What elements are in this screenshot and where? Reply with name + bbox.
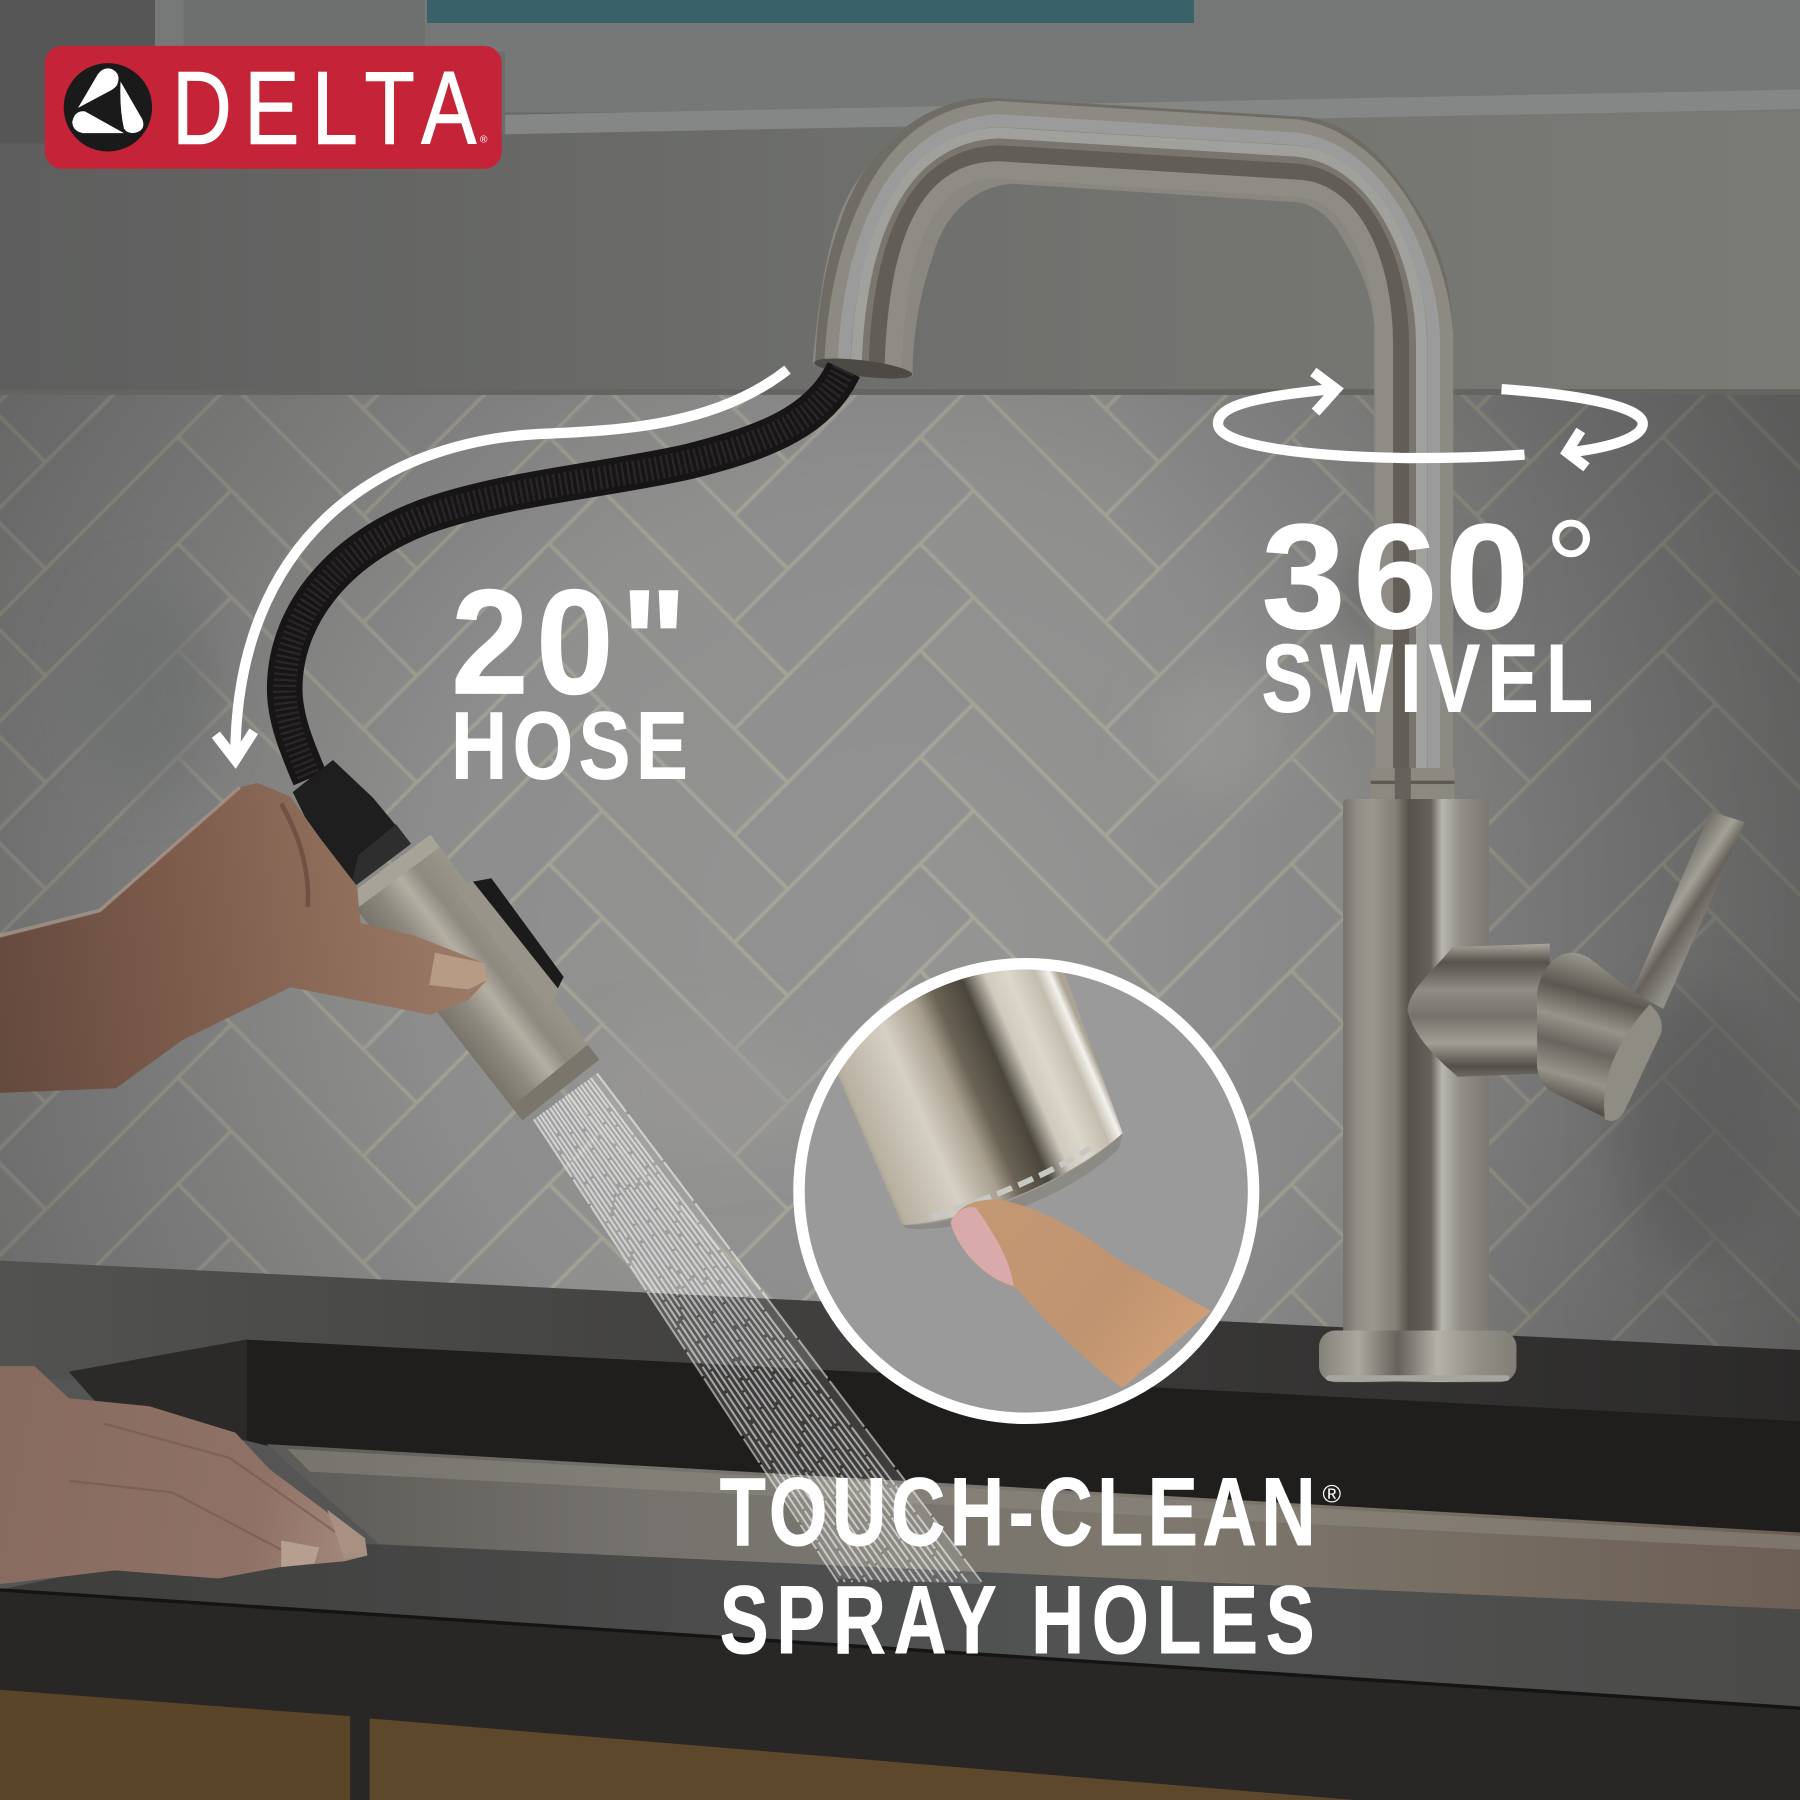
second hand resting on the counter — [0, 1366, 367, 1584]
text: 20 inch hose: 20" — [451, 558, 695, 725]
callout: touch-clean inset circle — [799, 918, 1254, 1418]
icon: spray nozzle close-up — [838, 970, 1123, 1229]
text: 20 inch hose: HOSE — [451, 693, 693, 799]
faucet: gooseneck spout — [813, 96, 1456, 792]
countertop and sink — [0, 1260, 1800, 1800]
Delta logo badge: DELTA — [172, 49, 489, 165]
text: 360 degree swivel: 360 — [1262, 493, 1537, 660]
text: 360 degree swivel: ° — [1544, 491, 1598, 643]
text: touch-clean spray holes: SPRAY HOLES — [720, 1567, 1322, 1674]
hand holding the sprayer — [0, 760, 599, 1120]
Delta logo badge: ® — [480, 134, 488, 145]
icon: fingertip pressing spray holes — [951, 1199, 1211, 1388]
text: touch-clean spray holes: ® — [1322, 1481, 1341, 1509]
backsplash: marble herringbone tile — [0, 379, 1800, 1366]
arrow: 20 inch hose reach — [216, 370, 787, 760]
text: 360 degree swivel — [1262, 491, 1600, 733]
Delta logo badge — [45, 46, 502, 169]
arrows: 360 degree swivel — [1218, 372, 1643, 467]
icon: Delta triangle mark — [64, 63, 152, 152]
text: touch-clean spray holes: TOUCH-CLEAN — [720, 1459, 1320, 1566]
scene background: wall, cabinet and trim — [0, 0, 1800, 395]
faucet: body, handle and base — [1319, 768, 1745, 1382]
water spray stream — [534, 1073, 982, 1584]
text: touch-clean spray holes — [720, 1459, 1341, 1674]
text: 20 inch hose — [451, 558, 695, 799]
text: 360 degree swivel: SWIVEL — [1262, 626, 1600, 733]
braided black hose — [285, 370, 844, 778]
